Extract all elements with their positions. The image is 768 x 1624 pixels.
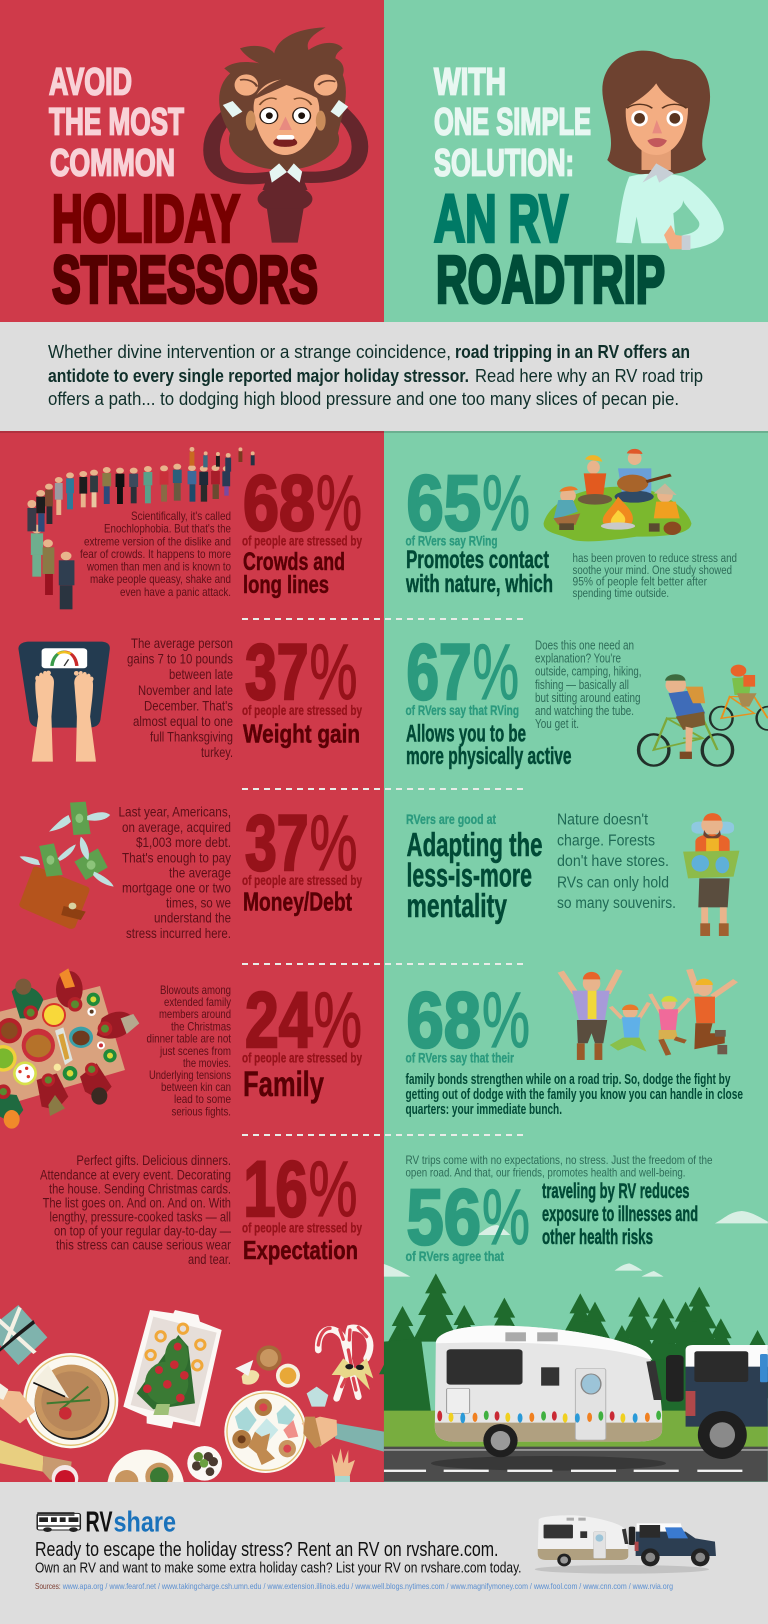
text: debt description: the average [169,865,231,881]
label: people stressed: of people are stressed by [242,534,362,548]
label: rvers agree that: of RVers agree that [406,1249,504,1264]
heading: promotes contact with nature: Promotes contact [406,546,549,574]
text: active description: outside, camping, hiking, [535,665,642,679]
heading: with one simple solution: WITH [434,62,506,104]
heading: adapting less-is-more mentality: Adapting the [406,826,542,863]
icon: rv and jeep [535,1515,716,1574]
heading: weight gain: Weight gain [243,718,360,748]
text: debt description: times, so we [166,895,231,911]
text: active description: and watching the tube. [535,704,634,718]
text: logotype: share [114,1506,176,1538]
icon: stressed woman [212,27,360,243]
stat: 68 percent: 68 [406,975,481,1064]
divider lines [242,619,526,1135]
text: expectation description: Attendance at every event. Decorating [40,1167,231,1182]
stat: 67 percent: 67 [406,627,472,716]
text: family bonds statement [406,1071,743,1118]
text: active description: Does this one need an [535,639,634,653]
row 3 right: less is more [406,812,739,936]
text: debt description: mortgage one or two [122,880,231,896]
text: weight description: turkey. [201,744,233,760]
text: crowds description: make people queasy, shake and [90,572,231,586]
text: intro paragraph: road tripping in an RV offers an [455,342,690,362]
text: debt description: on average, acquired [122,819,231,835]
icon: calm woman thumbs up [602,51,724,250]
text: expectation description: the house. Sending Christmas cards. [49,1181,231,1196]
row 4 right: family bonds [406,969,743,1118]
text: souvenirs description: so many souvenirs. [557,895,676,912]
text: expectation description: on top of your regular day-to-day — [54,1224,231,1239]
panel: red background [0,0,384,1482]
icon: jeep [666,1345,768,1459]
stat: 68 percent: % [316,458,362,547]
stat: 68 percent: 68 [243,458,315,547]
text: weight description: November and late [138,682,233,698]
stat: 67 percent: % [472,627,519,716]
text: intro paragraph: antidote to every single reported major holiday stressor. [48,366,469,386]
heading: with one simple solution [434,62,591,184]
text: intro paragraph: Read here why an RV road trip [475,366,703,386]
icon: family dinner table [0,968,139,1129]
text: nature description: has been proven to reduce stress and [572,553,737,565]
text: crowds description: extreme version of the dislike and [84,534,231,548]
text: weight description [127,635,233,760]
text: family description: the Christmas [171,1019,231,1033]
stat: 56 percent: 56 [406,1172,481,1261]
text: active description: You get it. [535,717,579,731]
heading: family: Family [243,1065,324,1104]
icon: campfire group [544,449,691,541]
text: expectation description: and tear. [188,1252,231,1267]
text: family description: members around [159,1007,231,1021]
icon: hiker with map [683,813,739,936]
text: crowds description: women than men and is known to [86,560,231,574]
stat: 65 percent: 65 [406,458,481,547]
heading: adapting less-is-more mentality: less-is-more [406,857,532,894]
row 1 right: nature [405,449,737,600]
heading: physically active: Allows you to be [406,721,526,748]
row 1 left: crowds [27,447,362,609]
road [384,1447,768,1482]
heading: holiday stressors [52,182,318,318]
label: people stressed: of people are stressed by [242,1221,362,1236]
text: intro paragraph: offers a path... to dodging high blood pressure and one too many slices of pecan pie. [48,389,679,409]
label: rvers say that rving: of RVers say that RVing [406,703,519,718]
icon: rv trailer [435,1326,662,1457]
text: weight description: December. That's [144,698,233,714]
heading: adapting less-is-more mentality: mentality [406,887,507,924]
heading: money debt: Money/Debt [243,887,352,917]
icon: crowd of people [27,447,255,609]
label: rvers say rving: of RVers say RVing [406,534,498,548]
text: family description: between kin can [161,1080,231,1094]
label: people stressed: of people are stressed by [242,873,362,888]
stat: 24 percent: % [314,975,362,1064]
text: family description: Blowouts among [160,983,231,997]
text: crowds description: fear of crowds. It happens to more [80,547,231,561]
row 4 left: family [0,968,362,1129]
text: no expectations note: open road. And that, our friends, promotes health and well-being. [406,1166,686,1180]
text: crowds description: even have a panic attack. [120,585,231,599]
heading: promotes contact with nature: with nature, which [405,570,553,598]
text: expectation description: The list goes on. And on. And on. With [43,1195,231,1210]
text: active description: fishing — basically all [535,678,629,692]
stat: 65 percent: % [482,458,530,547]
text: debt description: Last year, Americans, [118,804,231,820]
text: weight description: almost equal to one [133,713,233,729]
text: weight description: full Thanksgiving [150,729,233,745]
heading: an rv roadtrip: AN RV [434,182,568,256]
text: no expectations note: RV trips come with no expectations, no stress. Just the freedom of the [406,1153,713,1167]
row 2 left: weight [18,627,362,762]
icon: motorhome logo [37,1512,80,1532]
panel: intro band [0,322,768,433]
text: logotype: RV [86,1506,113,1538]
stat: 68 percent: % [482,975,530,1064]
illustration: holiday food table [0,1305,384,1527]
text: souvenirs description: don't have stores. [557,853,669,870]
text: nature description: soothe your mind. One study showed [572,565,732,577]
heading: avoid the most common [49,62,184,184]
heading: an rv roadtrip [434,182,665,318]
text: crowds description: Enochlophobia. But that's the [104,522,231,536]
text: crowds description: Scientifically, it's called [131,509,231,523]
row 5 right: health [384,1153,768,1277]
heading: physically active [406,721,572,770]
text: crowds description [80,509,231,599]
stat: 37 percent: 37 [245,798,308,887]
stat: 37 percent: % [310,627,358,716]
text: weight description: The average person [131,635,233,651]
heading: expectation: Expectation [243,1235,358,1265]
text: expectation description: this stress can cause serious wear [56,1238,231,1253]
text: debt description: That's enough to pay [122,849,231,865]
text: expectation description [40,1153,231,1267]
text: souvenirs description [557,812,676,912]
text: weight description: between late [169,666,233,682]
row 5 left: expectation [40,1144,362,1267]
panel: green background [384,0,768,1482]
heading: with one simple solution: ONE SIMPLE [434,102,591,144]
label: rvers say that their: of RVers say that their [406,1051,515,1066]
stat: 56 percent: % [482,1172,530,1261]
label: people stressed: of people are stressed by [242,703,362,718]
text: nature description [572,553,737,600]
heading: physically active: more physically active [406,743,572,770]
text: family description: dinner table are not [146,1032,232,1046]
trees [379,1273,768,1413]
heading: crowds and long lines: long lines [243,571,329,599]
text: souvenirs description: Nature doesn't [557,812,649,829]
text: sources: Sources: [35,1581,61,1591]
text: active description: explanation? You're [535,652,621,666]
text: intro paragraph: Whether divine intervention or a strange coincidence, [48,342,451,362]
label: rvers are good at: RVers are good at [406,812,496,827]
heading: promotes contact with nature [405,546,553,598]
panel: footer band [0,1482,768,1624]
text: call to action: Ready to escape the holiday stress? Rent an RV on rvshare.com. [35,1539,498,1561]
text: family description: Underlying tensions [149,1068,231,1082]
text: nature description: spending time outside. [572,588,669,600]
text: family description: lead to some [174,1092,231,1106]
header: solution title [434,62,665,318]
stat: 16 percent: % [308,1144,358,1233]
stat: 16 percent: 16 [244,1144,308,1233]
text: no expectations note [406,1153,713,1180]
text: debt description: $1,003 more debt. [136,834,231,850]
text: souvenirs description: RVs can only hold [557,874,669,891]
row 3 left: money [19,798,362,941]
text: family description: the movies. [183,1056,231,1070]
label: people stressed: of people are stressed by [242,1051,362,1066]
heading: avoid the most common: COMMON [50,142,175,184]
text: debt description: understand the [154,910,231,926]
heading: crowds and long lines: Crowds and [243,548,345,576]
ground [384,1411,768,1447]
heading: avoid the most common: AVOID [49,62,132,104]
icon: wallet with flying money [19,802,114,929]
heading: traveling by rv [542,1180,698,1249]
heading: avoid the most common: THE MOST [49,102,184,144]
heading: holiday stressors: STRESSORS [52,242,318,318]
text: souvenirs description: charge. Forests [557,833,655,850]
heading: adapting less-is-more mentality [406,826,542,924]
text: active description [535,639,642,731]
text: expectation description: Perfect gifts. Delicious dinners. [76,1153,231,1168]
clouds [384,1211,768,1277]
text: debt description [118,804,231,941]
heading: crowds and long lines [243,548,345,599]
illustration: rv roadtrip scene [379,1273,768,1482]
text: family description: just scenes from [159,1044,231,1058]
text: family description [146,983,232,1118]
stat: 24 percent: 24 [245,975,313,1064]
logo: rvshare [37,1506,176,1538]
heading: traveling by rv: other health risks [542,1226,653,1249]
icon: jumping family [561,969,736,1060]
heading: with one simple solution: SOLUTION: [434,142,574,184]
text: nature description: 95% of people felt better after [572,577,707,589]
text: family description: extended family [164,995,231,1009]
text: debt description: stress incurred here. [126,925,231,941]
text: active description: but sitting around eating [535,691,641,705]
text: weight description: gains 7 to 10 pounds [127,651,233,667]
text: list your rv: Own an RV and want to make some extra holiday cash? List your RV on rvshare.com today. [35,1560,522,1577]
text: family description: serious fights. [172,1104,231,1118]
heading: holiday stressors: HOLIDAY [52,182,240,256]
stat: 37 percent: % [310,798,358,887]
icon: scale with feet [18,642,110,762]
stat: 37 percent: 37 [245,627,308,716]
row 2 right: active [406,627,768,770]
header: stressors title [49,62,318,318]
icon: cyclists [639,665,768,766]
text: expectation description: lengthy, pressure-cooked tasks — all [50,1210,231,1225]
text: intro paragraph [48,342,703,409]
text: family bonds statement: quarters: your immediate bunch. [406,1101,562,1118]
